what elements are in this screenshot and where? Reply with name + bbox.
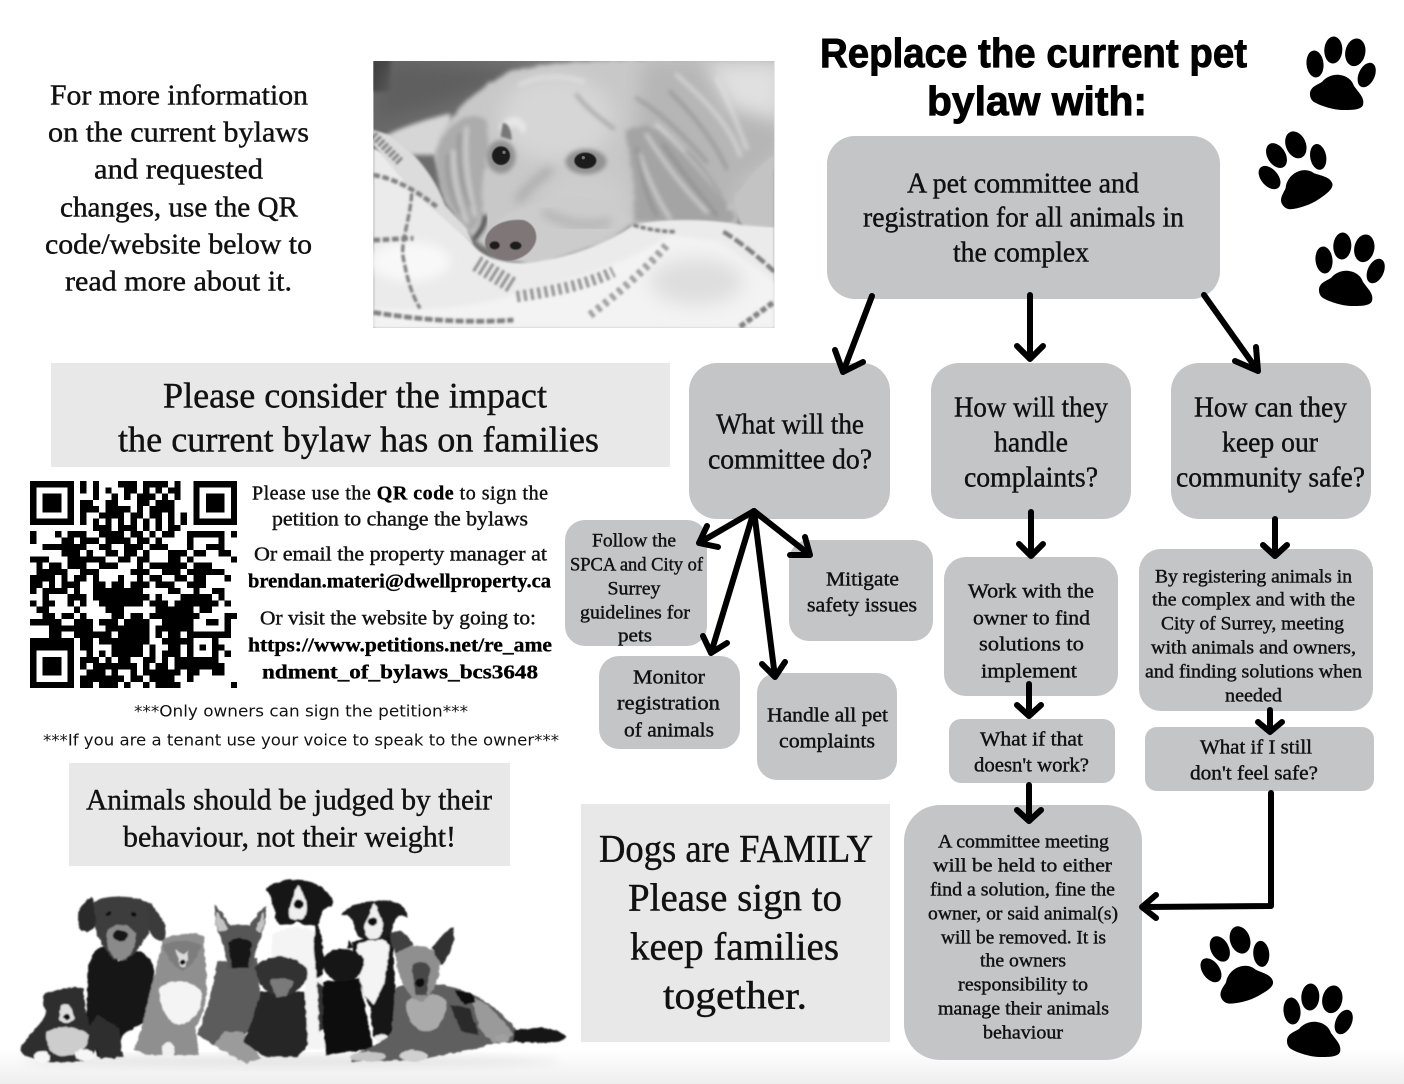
note: owners and tenants [43, 701, 559, 749]
box: handle all pet complaints: Handle all pet [767, 704, 888, 726]
arrow: to safety question [1204, 295, 1258, 371]
box: how can they keep our community safe: community safe? [1176, 462, 1365, 493]
text block: more information: For more information [50, 80, 308, 111]
box: committee meeting outcome: will be removed. It is [941, 927, 1106, 948]
box: what will the committee do: committee do? [708, 444, 872, 475]
black lab puppy [323, 978, 374, 1055]
box: committee meeting outcome: owner, or said animal(s) [928, 903, 1118, 924]
box: by registering animals: and finding solutions when [1145, 661, 1363, 682]
arrow: work to what if [1017, 684, 1041, 716]
panel: dogs are family: Dogs are FAMILY [599, 827, 873, 870]
box: follow SPCA guidelines: guidelines for [580, 602, 691, 623]
box: by registering animals: the complex and with the [1152, 589, 1355, 610]
box: follow SPCA guidelines [565, 520, 707, 646]
shih tzu [243, 992, 308, 1057]
panel: animals should be judged [69, 763, 510, 866]
box: how can they keep our community safe [1171, 363, 1371, 519]
text block: more information: on the current bylaws [48, 117, 309, 148]
box: committee meeting outcome: responsibility to [958, 974, 1088, 995]
box: committee meeting outcome: find a solution, fine the [930, 879, 1115, 900]
malinois [197, 958, 261, 1063]
box: pet committee and registration: registration for all animals in [863, 202, 1184, 233]
box: pet committee and registration: A pet committee and [907, 168, 1139, 199]
box: how will they handle complaints: complaints? [964, 462, 1098, 493]
box: handle all pet complaints: complaints [779, 730, 875, 752]
box: by registering animals: with animals and owners, [1151, 637, 1356, 658]
panel: consider the impact: Please consider the impact [163, 375, 547, 415]
arrow: elbow to committee meeting [1142, 793, 1271, 918]
box: by registering animals: needed [1225, 685, 1283, 706]
arrow: fan to mitigate safety [754, 511, 810, 555]
note: owners and tenants: ***If you are a tenant use your voice to speak to the owner*** [43, 730, 559, 749]
box: how will they handle complaints [931, 363, 1131, 519]
box: work with the owner [944, 557, 1118, 696]
arrow: complaints to work with owner [1019, 512, 1043, 556]
title [820, 30, 1247, 124]
note: owners and tenants: ***Only owners can sign the petition*** [134, 701, 468, 720]
text block: more information: changes, use the QR [60, 192, 298, 223]
panel: dogs are family: keep families [630, 925, 839, 968]
arrow: fan to follow guidelines [699, 511, 754, 547]
box: committee meeting outcome [904, 805, 1142, 1060]
panel: dogs are family: Please sign to [628, 876, 842, 919]
panel: dogs are family [581, 804, 890, 1042]
box: what will the committee do [689, 363, 890, 519]
box: what if that doesn't work: What if that [980, 728, 1083, 750]
box: how can they keep our community safe: How can they [1194, 392, 1347, 423]
box: what will the committee do: What will the [716, 409, 864, 440]
box: what if I still don't feel safe [1145, 727, 1374, 791]
box: mitigate safety issues [789, 540, 933, 641]
arrow: to committee question [835, 296, 872, 372]
arrow: safety to registering [1263, 519, 1287, 556]
panel: consider the impact: the current bylaw has on families [118, 419, 599, 459]
box: by registering animals: By registering animals in [1155, 566, 1353, 587]
arrow: what if to committee meeting [1017, 785, 1041, 821]
arrow: registering to what if [1258, 710, 1282, 732]
great dane [86, 947, 155, 1058]
left puppy [19, 987, 96, 1062]
title: bylaw with: [927, 78, 1147, 124]
box: work with the owner: solutions to [979, 633, 1084, 655]
box: committee meeting outcome: manage their animals [938, 998, 1109, 1019]
icon: paw print 5 [1282, 983, 1356, 1057]
QR code [30, 481, 237, 688]
box: monitor registration: Monitor [633, 666, 705, 688]
text block: more information: code/website below to [45, 229, 312, 260]
text block: QR code instructions [248, 482, 552, 683]
box: monitor registration: registration [617, 692, 720, 714]
text block: QR code instructions: Or visit the website by going to: [260, 607, 536, 629]
eye surroundings [486, 140, 516, 173]
box: what if that doesn't work [949, 719, 1115, 783]
arrow: fan to handle complaints [754, 511, 785, 677]
panel: animals should be judged: behaviour, not their weight! [123, 820, 456, 853]
text block: QR code instructions: brendan.materi@dwellproperty.ca [248, 570, 551, 592]
box: handle all pet complaints [757, 673, 897, 780]
panel: dogs are family: together. [663, 974, 807, 1017]
panel: consider the impact [51, 363, 670, 467]
photo: sad golden retriever on blanket [370, 58, 783, 328]
box: mitigate safety issues: safety issues [807, 594, 917, 616]
arrow: fan to monitor registration [703, 511, 754, 653]
panel: animals should be judged: Animals should be judged by their [86, 783, 492, 816]
text block: QR code instructions: petition to change the bylaws [272, 508, 528, 530]
text block: QR code instructions: Please use the QR code to sign the [252, 482, 548, 504]
box: mitigate safety issues: Mitigate [826, 568, 899, 590]
box: follow SPCA guidelines: pets [618, 625, 652, 646]
tall border collie [272, 927, 326, 1050]
icon: paw print 2 [1245, 118, 1349, 221]
box: committee meeting outcome: behaviour [983, 1022, 1064, 1043]
box: committee meeting outcome: will be held to either [933, 855, 1113, 876]
icon: paw print 1 [1305, 36, 1379, 110]
box: what if I still don't feel safe: What if I still [1200, 736, 1312, 758]
box: how can they keep our community safe: keep our [1222, 427, 1319, 458]
box: what if I still don't feel safe: don't feel safe? [1190, 762, 1318, 784]
icon: paw print 3 [1314, 232, 1388, 306]
photo: group of dogs [19, 880, 566, 1068]
box: by registering animals: City of Surrey, meeting [1161, 613, 1345, 634]
box: what if that doesn't work: doesn't work? [974, 754, 1089, 776]
box: committee meeting outcome: the owners [980, 950, 1066, 971]
box: follow SPCA guidelines: SPCA and City of [570, 554, 704, 575]
box: follow SPCA guidelines: Follow the [592, 530, 676, 551]
arrow: to complaints question [1017, 295, 1043, 359]
box: pet committee and registration: the complex [953, 237, 1089, 268]
text block: QR code instructions: Or email the property manager at [254, 543, 547, 565]
box: how will they handle complaints: How will they [954, 392, 1108, 423]
text block: QR code instructions: https://www.petitions.net/re_ame [248, 634, 552, 656]
boxer [352, 932, 395, 1042]
box: committee meeting outcome: A committee meeting [938, 831, 1110, 852]
text block: QR code instructions: ndment_of_bylaws_bcs3648 [262, 661, 538, 683]
box: by registering animals [1139, 549, 1373, 711]
box: pet committee and registration [827, 136, 1220, 299]
box: monitor registration [599, 656, 740, 749]
text block: more information: and requested [94, 154, 263, 185]
box: monitor registration: of animals [624, 719, 714, 741]
title: Replace the current pet [820, 30, 1247, 76]
box: follow SPCA guidelines: Surrey [608, 578, 661, 599]
box: work with the owner: Work with the [968, 580, 1094, 602]
box: work with the owner: implement [981, 660, 1077, 682]
sheltie [134, 934, 207, 1055]
bottom floor shading [0, 1050, 1404, 1084]
text block: more information [45, 80, 312, 297]
icon: paw print 4 [1188, 914, 1290, 1015]
german shepherd [352, 984, 566, 1062]
box: work with the owner: owner to find [973, 607, 1090, 629]
text block: more information: read more about it. [65, 266, 292, 297]
box: how will they handle complaints: handle [994, 427, 1068, 458]
